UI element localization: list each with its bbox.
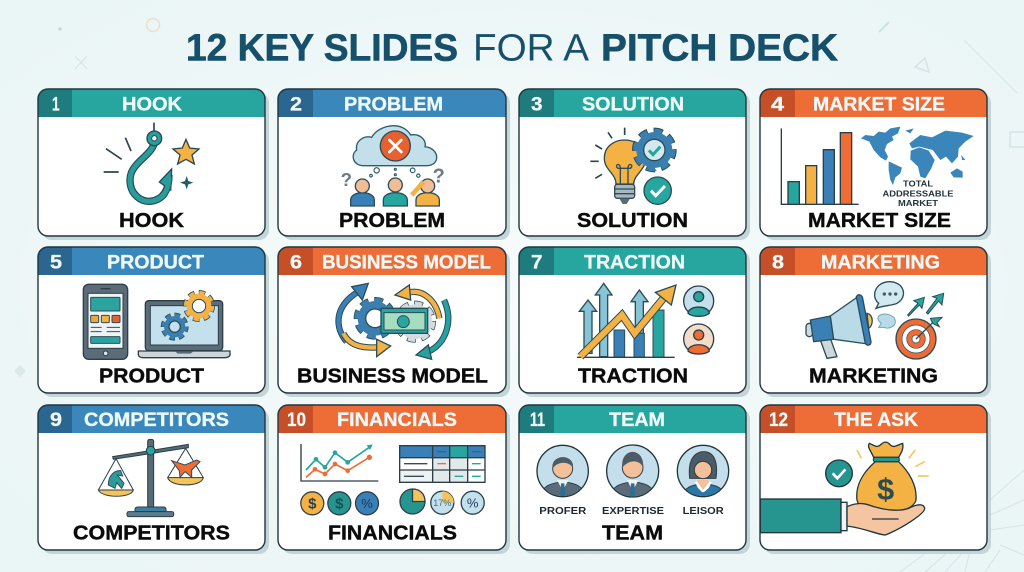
header: problem: PROBLEM	[344, 94, 443, 116]
header: traction: TRACTION	[584, 252, 685, 274]
map caption: ADDRESSABLE	[882, 188, 954, 198]
label: hook: HOOK	[119, 209, 184, 232]
header: market size: MARKET SIZE	[813, 94, 945, 116]
label: product: PRODUCT	[99, 365, 204, 388]
number 3: 3	[531, 94, 543, 116]
header: team: TEAM	[609, 409, 665, 431]
title: PITCH DECK	[601, 26, 838, 68]
label: problem: PROBLEM	[339, 209, 445, 232]
coins and percentage badges: %	[361, 496, 373, 511]
label: market size: MARKET SIZE	[808, 209, 951, 232]
header: product: PRODUCT	[107, 252, 204, 274]
icon: fish hook with star	[104, 123, 199, 201]
bar chart	[781, 128, 859, 204]
label: solution: SOLUTION	[577, 209, 688, 232]
panel: 9 competitors	[38, 405, 269, 554]
panel: 8 marketing	[760, 247, 991, 397]
header: financials: FINANCIALS	[337, 409, 457, 431]
label: competitors: COMPETITORS	[73, 521, 230, 544]
header: business model: BUSINESS MODEL	[322, 252, 491, 274]
number 4: 4	[771, 94, 784, 116]
label: team: TEAM	[602, 521, 663, 544]
icon: growth chart with arrows and users	[577, 283, 714, 357]
title: FOR A	[473, 26, 590, 68]
portrait: leisor	[677, 445, 729, 498]
coins and percentage badges	[301, 489, 484, 515]
panel: 11 team	[519, 405, 750, 554]
panel: 7 traction	[519, 247, 750, 397]
icon: cloud with error and three puzzled people	[341, 126, 445, 206]
portrait captions: EXPERTISE	[602, 506, 664, 517]
data table	[400, 446, 485, 482]
number 12: 12	[769, 409, 788, 431]
map caption: TOTAL	[903, 178, 933, 188]
portrait captions	[539, 506, 725, 517]
panel: 1 hook	[38, 89, 269, 240]
number 2: 2	[290, 94, 302, 116]
label: financials: FINANCIALS	[328, 521, 457, 544]
portrait captions: LEISOR	[683, 506, 725, 517]
number 5: 5	[50, 252, 62, 274]
panel: 10 financials	[278, 405, 510, 554]
portrait captions: PROFER	[539, 506, 587, 517]
panel: 6 business model	[278, 247, 510, 397]
number 8: 8	[772, 252, 784, 274]
world map	[861, 127, 974, 185]
number 10: 10	[287, 409, 306, 431]
label: traction: TRACTION	[578, 365, 688, 388]
panel: 3 solution	[519, 89, 750, 240]
icon: balance scale	[98, 439, 203, 517]
number 6: 6	[290, 252, 302, 274]
icon: megaphone, speech bubbles and target	[806, 282, 944, 359]
header: competitors: COMPETITORS	[84, 409, 229, 431]
header: the ask: THE ASK	[834, 409, 918, 431]
coins and percentage badges: %	[467, 496, 479, 510]
number 1: 1	[52, 94, 60, 116]
number 11: 11	[530, 409, 545, 431]
icon: gears, money and cycle arrows	[338, 283, 448, 359]
icon: hand holding money bag with check: $	[877, 472, 894, 506]
panel: 2 problem	[278, 89, 510, 240]
line chart	[301, 444, 378, 481]
icon: phone and laptop with gears	[83, 284, 230, 359]
portrait: profer	[537, 445, 588, 498]
coins and percentage badges: 17%	[433, 498, 451, 508]
label: marketing: MARKETING	[809, 365, 938, 388]
title	[186, 26, 838, 68]
map caption	[882, 178, 954, 208]
icon: cloud with error and three puzzled people: ?	[341, 169, 352, 190]
panel: 5 product	[38, 247, 269, 397]
header: hook: HOOK	[122, 94, 182, 116]
number 9: 9	[50, 409, 62, 431]
label: business model: BUSINESS MODEL	[297, 365, 488, 388]
map caption: MARKET	[898, 198, 939, 208]
panel: 4 market size	[760, 89, 991, 240]
icon: cloud with error and three puzzled people: ?	[433, 166, 445, 188]
header: solution: SOLUTION	[582, 94, 684, 116]
header: marketing: MARKETING	[821, 252, 940, 274]
icon: light bulb, gear and check	[590, 128, 672, 204]
icon: hand holding money bag with check	[760, 442, 929, 535]
portrait: expertise	[607, 445, 659, 498]
title: 12 KEY SLIDES	[186, 26, 458, 68]
panel: 12 the ask	[760, 405, 991, 554]
number 7: 7	[531, 252, 542, 274]
coins and percentage badges: $	[335, 496, 344, 512]
coins and percentage badges: $	[308, 496, 317, 512]
